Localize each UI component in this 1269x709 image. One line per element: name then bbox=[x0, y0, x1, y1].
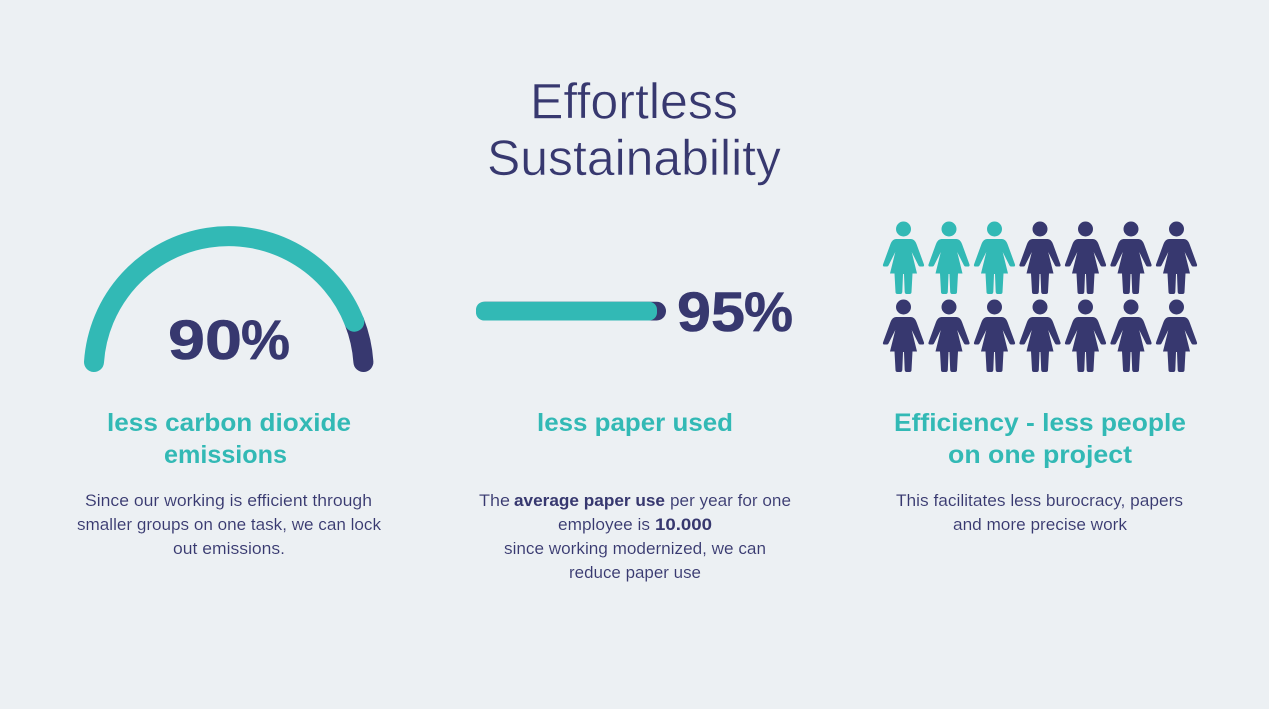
description: smaller groups on one task, we can lock bbox=[77, 516, 382, 534]
gauge value: % bbox=[241, 308, 290, 371]
panel: carbon dioxide bbox=[77, 236, 382, 558]
description bbox=[77, 492, 382, 558]
progress bar bbox=[476, 302, 666, 320]
description bbox=[896, 492, 1183, 534]
bar value: 95 bbox=[677, 280, 745, 343]
panel: paper bbox=[476, 280, 793, 582]
heading: emissions bbox=[164, 441, 287, 469]
heading bbox=[107, 409, 351, 469]
description: out emissions. bbox=[173, 540, 285, 558]
title: Sustainability bbox=[487, 129, 782, 186]
description: This facilitates less burocracy, papers bbox=[896, 492, 1183, 510]
title bbox=[487, 72, 782, 186]
description: employee is bbox=[558, 516, 650, 534]
description: since working modernized, we can bbox=[504, 540, 766, 558]
gauge chart bbox=[94, 236, 363, 362]
heading: less paper used bbox=[537, 409, 733, 437]
pictogram: people bbox=[883, 222, 1197, 372]
description: Since our working is efficient through bbox=[85, 492, 372, 510]
panel: efficiency bbox=[883, 222, 1197, 534]
description: The bbox=[479, 492, 510, 510]
title: Effortless bbox=[530, 72, 738, 130]
bar value bbox=[677, 280, 793, 343]
bar value: % bbox=[744, 280, 793, 343]
heading: less carbon dioxide bbox=[107, 409, 351, 437]
description: average paper use bbox=[514, 492, 665, 510]
gauge value: 90 bbox=[168, 308, 242, 371]
heading: Efficiency - less people bbox=[894, 409, 1186, 437]
heading bbox=[894, 409, 1186, 469]
gauge value bbox=[168, 308, 290, 371]
description: reduce paper use bbox=[569, 564, 701, 582]
description bbox=[479, 492, 791, 582]
description: and more precise work bbox=[953, 516, 1128, 534]
heading: on one project bbox=[948, 441, 1133, 469]
description: 10.000 bbox=[655, 516, 712, 534]
description: per year for one bbox=[670, 492, 791, 510]
